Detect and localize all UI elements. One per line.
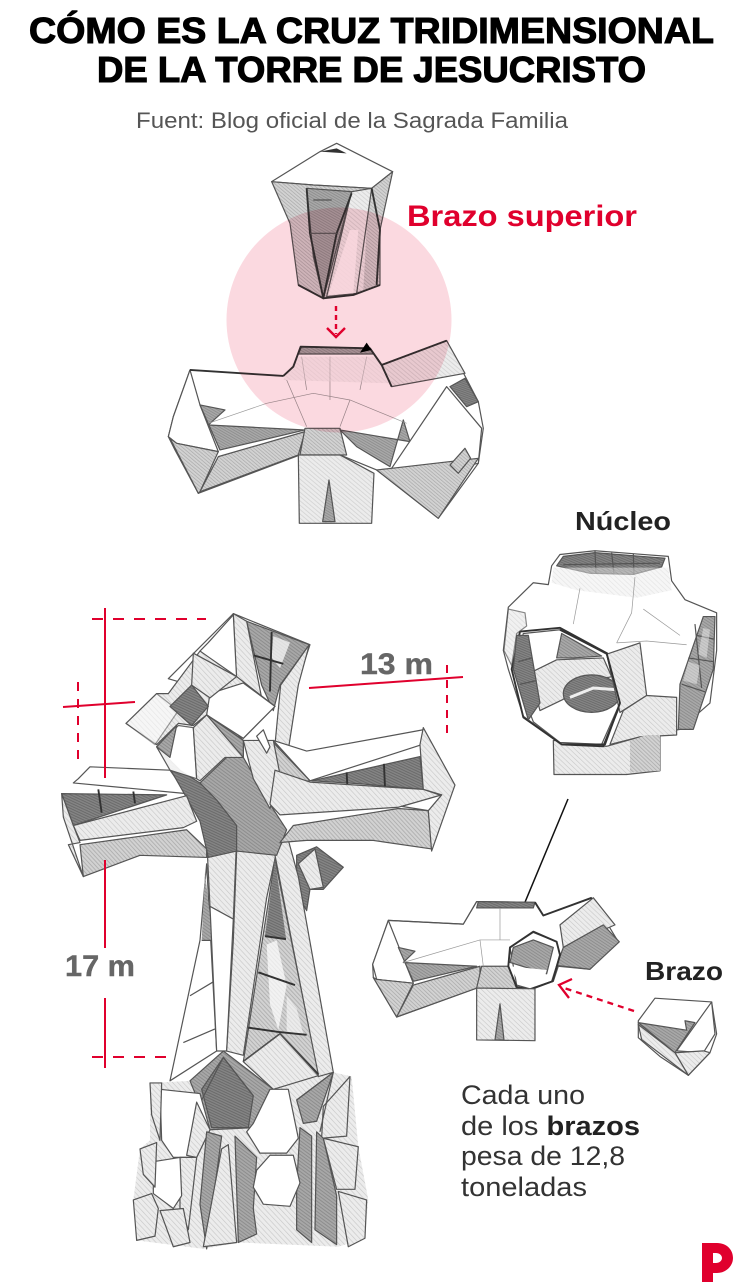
- source line: Fuent: Blog oficial de la Sagrada Familia: [136, 108, 569, 133]
- text: brazos weight: Cada uno: [461, 1080, 585, 1110]
- highlight circle: [226, 208, 452, 432]
- sketch: crown underlay: [133, 1051, 368, 1249]
- logo: [702, 1243, 733, 1282]
- sketch: detached arm: [638, 998, 717, 1075]
- sketch: arms and capital: [62, 651, 455, 877]
- sketch: detached upper arm: [272, 143, 393, 298]
- sketch: shaft: [170, 834, 333, 1089]
- sketch: núcleo: [503, 551, 717, 774]
- label: 17 m: 17 m: [65, 950, 135, 983]
- sketch: upper arm and cross head: [168, 143, 483, 523]
- label: núcleo: Núcleo: [575, 506, 671, 536]
- text: brazos weight: de los brazos: [461, 1111, 640, 1141]
- title: [29, 9, 714, 90]
- title: DE LA TORRE DE JESUCRISTO: [97, 49, 646, 90]
- dimension lines: 17 m: [63, 608, 206, 1068]
- arrow: brazo to head: [559, 979, 634, 1011]
- sketch: full cross: [62, 614, 455, 1249]
- sketch: crown base: [133, 1051, 367, 1249]
- text: brazos weight: [461, 1080, 640, 1202]
- sketch: cross head with arms: [168, 341, 483, 523]
- dimension lines: 13 m: [309, 665, 463, 733]
- text: brazos weight: toneladas: [461, 1172, 587, 1202]
- sketch: cross head with open arm: [373, 898, 619, 1041]
- dimension: 17 m: [63, 608, 206, 1068]
- title: CÓMO ES LA CRUZ TRIDIMENSIONAL: [29, 9, 714, 51]
- connector line: [513, 799, 568, 931]
- label: brazo: Brazo: [645, 956, 723, 986]
- dimension: 13 m: [309, 648, 463, 733]
- text: brazos weight: pesa de 12,8: [461, 1141, 625, 1171]
- sketch: back of cross: [73, 614, 423, 911]
- label: 13 m: 13 m: [360, 648, 433, 681]
- label: brazo superior: Brazo superior: [407, 200, 637, 233]
- arrow: upper arm to head: [327, 306, 345, 337]
